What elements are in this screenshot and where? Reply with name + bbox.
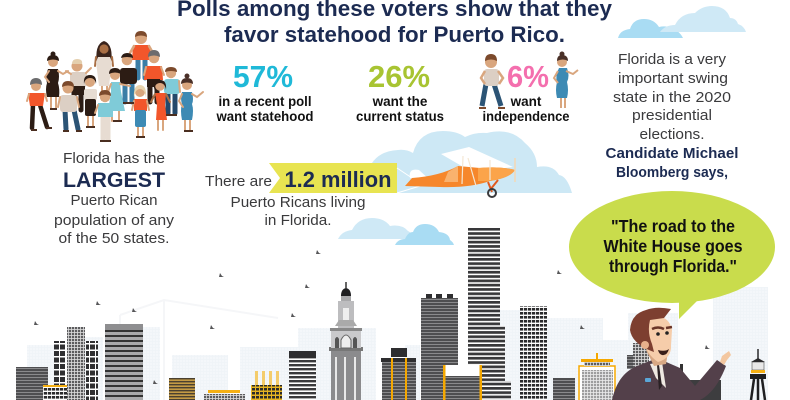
hair xyxy=(630,308,671,352)
person: man beige top blue jeans xyxy=(58,81,79,129)
clouds: lower pair xyxy=(338,218,454,245)
speech bubble: "The road to the xyxy=(611,216,735,236)
birds xyxy=(34,250,710,384)
text: swing state: state in the 2020 xyxy=(613,90,731,106)
person: woman black skirt xyxy=(84,75,97,126)
skyline: middle buildings xyxy=(169,351,316,400)
text: swing state: Candidate Michael xyxy=(606,146,738,162)
text: There are / Puerto Ricans: in Florida. xyxy=(264,213,332,229)
icon: man beside 6% xyxy=(479,54,505,109)
building: clock tower xyxy=(329,282,363,400)
person: orange shirt top back xyxy=(130,31,153,78)
shoes xyxy=(31,102,193,142)
text: swing state: elections. xyxy=(640,127,704,143)
stat: 57%: in a recent poll xyxy=(218,94,312,109)
people group xyxy=(27,31,203,142)
building: striped block with orange bars xyxy=(381,348,416,400)
title: favor statehood for Puerto Rico. xyxy=(224,22,565,47)
text: Florida has the largest: LARGEST xyxy=(63,169,165,192)
speech bubble: through Florida." xyxy=(609,256,737,276)
stat: 57%: want statehood xyxy=(216,109,314,124)
illustration: orange biplane xyxy=(397,147,515,197)
text: There are / Puerto Ricans: Puerto Ricans living xyxy=(230,195,366,211)
icon: woman beside 6% xyxy=(554,52,578,108)
text: Florida has the largest xyxy=(54,151,175,247)
crane xyxy=(120,300,278,400)
character: Michael Bloomberg xyxy=(612,308,731,400)
text: Florida has the largest: Florida has the xyxy=(63,151,165,167)
stat: 6%: 6% xyxy=(507,59,549,94)
illustration: spire tower xyxy=(750,349,766,400)
stat: 6% xyxy=(482,59,570,124)
text: Florida has the largest: Puerto Rican xyxy=(70,193,158,209)
skyline: left buildings xyxy=(16,324,143,400)
text: Florida has the largest: of the 50 states. xyxy=(58,231,170,247)
speech bubble: White House goes xyxy=(604,236,743,256)
hand xyxy=(720,351,731,365)
building: orange framed xyxy=(443,365,482,400)
text: There are / Puerto Ricans xyxy=(205,174,366,229)
person: light blue dress woman xyxy=(108,68,130,121)
stat: 57%: 57% xyxy=(233,59,293,94)
title xyxy=(177,0,613,47)
clouds: top right xyxy=(618,6,746,38)
ribbon: 1.2 million: 1.2 million xyxy=(284,167,392,192)
text: swing state: presidential xyxy=(632,108,712,124)
cloud: behind plane xyxy=(372,131,572,193)
face xyxy=(642,316,672,362)
jacket xyxy=(612,358,726,400)
person: man light blue front xyxy=(95,90,119,139)
text: swing state: Florida is a very xyxy=(618,52,727,68)
shirt and tie xyxy=(650,362,666,388)
text: Florida has the largest: population of any xyxy=(54,213,175,229)
person: woman white dress xyxy=(95,41,113,100)
person: man light blue shirt back right xyxy=(164,67,180,113)
skyline: right buildings xyxy=(520,306,721,400)
stat: 26%: current status xyxy=(356,109,444,124)
skyline: faint background buildings xyxy=(27,287,768,400)
lapel pin xyxy=(645,378,651,382)
person: orange dress woman xyxy=(151,80,170,130)
neck xyxy=(646,350,668,366)
person: blue dress woman right xyxy=(179,74,203,130)
person: orange top gray hair xyxy=(144,50,164,102)
stat: 26%: want the xyxy=(372,94,428,109)
text: swing state: important swing xyxy=(618,71,728,87)
stat: 57% xyxy=(216,59,314,124)
building: tall striped tower xyxy=(468,228,511,400)
person: woman black dress xyxy=(45,52,68,108)
person: dark shirt man xyxy=(120,53,137,102)
text: swing state xyxy=(606,52,738,181)
person: blonde woman blue skirt xyxy=(132,85,149,136)
person: gray hair orange shirt left xyxy=(27,78,47,128)
stat: 26%: 26% xyxy=(368,59,430,94)
speech bubble xyxy=(569,191,775,319)
text: There are / Puerto Ricans: There are xyxy=(205,174,272,190)
stat: 6%: want xyxy=(510,94,542,109)
text: swing state: Bloomberg says, xyxy=(616,165,728,181)
stat: 6%: independence xyxy=(482,109,570,124)
mouth xyxy=(658,349,669,355)
ear xyxy=(641,341,649,349)
building: gray tower xyxy=(421,294,458,400)
eyebrows xyxy=(652,327,672,329)
stat: 26% xyxy=(356,59,444,124)
person: blond man xyxy=(66,59,91,110)
eyes xyxy=(656,332,660,336)
